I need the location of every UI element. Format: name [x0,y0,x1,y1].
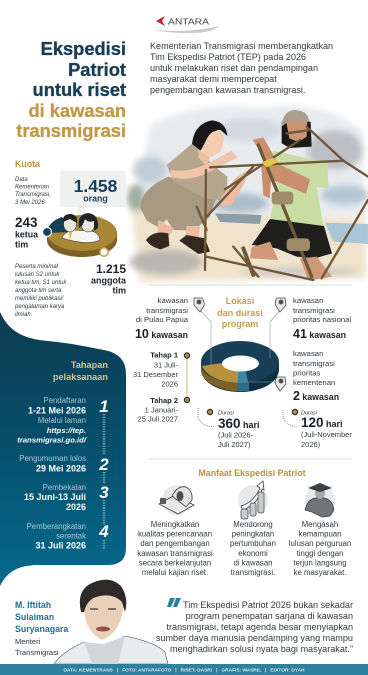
intro text: pengembangan kawasan transmigrasi. [150,85,305,95]
benefit 2: di kawasan [233,558,273,568]
duration: 120 hari: (Juli-November [301,430,352,439]
duration: 120 hari: 120 hari [301,415,343,430]
step numbers: 4 [98,522,109,541]
text: requirements: Peserta minimal [15,264,59,270]
right: prioritas: prioritas [293,368,320,378]
benefit 3: Mengasah [302,520,338,529]
stat: ketua tim: tim [15,240,28,250]
step numbers: 1 [99,397,109,416]
left: papua: transmigrasi [146,306,188,315]
logo: ANTARA [154,16,219,33]
quote text: sumber daya manusia pendamping yang mampu [156,633,353,643]
timeline: tahap: 1 Januari- [145,406,178,414]
person name and role: Sulaiman [15,612,54,622]
connector lines [199,309,281,382]
panel: tahapan pelaksanaan [0,312,126,586]
person name and role: Menteri [15,637,41,646]
duration: 360 hari [207,409,260,449]
step numbers [98,397,109,541]
dotted connectors [198,408,298,427]
divider top [149,284,352,286]
timeline: tahap: Tahap 2 [150,396,178,405]
steps text: Pengumuman lolos [19,454,86,463]
text: data source: Transmigrasi, [15,192,51,198]
quote text: transmigrasi, tetapi agenda besar menyiapkan [166,622,353,632]
intro text: masyarakat demi mempercepat [150,74,277,84]
benefit 2 [230,520,276,577]
panel: kuota [14,159,127,318]
benefit 1: secara berkelanjutan [139,558,211,568]
callout: total [60,171,126,218]
stat: anggota tim [91,262,127,296]
benefit 3: terjun langsung [293,558,347,568]
sea and boats [325,223,368,244]
text: requirements: anggota tim serta [15,288,62,294]
intro text [150,41,333,95]
left: papua [135,296,189,341]
intro text: Tim Ekspedisi Patriot (TEP) pada 2026 [150,52,306,62]
benefit 1: kawasan transmigrasi [137,549,213,558]
intro text: untuk melakukan riset dan pendampingan [150,63,318,73]
benefit 1: Meningkatkan [151,520,199,529]
icon: quote mark [167,598,181,607]
person name and role: Suryanagara [15,624,68,634]
benefit 1: kualitas perencanaan [138,530,212,538]
timeline ticks [103,414,105,549]
portrait: M. Iftitah Suryanagara [54,580,168,664]
duration: 360 hari: 360 hari [218,416,260,431]
right: prioritas [293,296,351,403]
benefit 2: pertumbuhan [230,539,276,548]
heading: lokasi: program [222,319,258,329]
stat: ketua tim: 243 [15,215,38,230]
person name and role: M. Iftitah [15,600,51,610]
branch frame [197,127,368,280]
benefit 2: Mendorong [233,520,273,529]
benefit texts [137,520,351,577]
stat: anggota tim: anggota [91,276,127,286]
steps text: Pembekalan [43,483,86,492]
icon: graduate [305,483,335,517]
intro text: Kementerian Transmigrasi memberangkatkan [150,41,333,51]
heading: lokasi: dan durasi [217,308,263,318]
icon: growth arrow with coins [238,481,268,519]
heading: lokasi [217,296,263,329]
timeline: tahap: 31 Desember [133,370,178,379]
steps text: Pemberangkatan [27,522,86,531]
person name and role [15,600,68,657]
text: data source [15,177,51,206]
right: prioritas: 2 kawasan [293,389,339,403]
quote text: menghadirkan solusi nyata bagi masyarakat.” [170,644,353,654]
title: untuk riset [33,79,126,100]
benefit 3: kemampuan [299,530,341,538]
panel: lokasi dan durasi program [133,296,352,449]
heading: manfaat: Manfaat Ekspedisi Patriot [198,468,306,478]
callout: total: 1.458 [74,176,118,196]
benefit 2: transmigrasi. [231,568,275,577]
logo: ANTARA: ANTARA [168,16,209,26]
text: requirements: ilmiah. [15,312,32,318]
steps text: serentak [56,532,86,540]
title: Ekspedisi [41,38,126,59]
quote text: program penempatan sarjana di kawasan [186,611,353,621]
footer bar: DATA: KEMENTRANS | FOTO: ANTARAFOTO | RISET: DASRI | GRAFIS: WASRIL | EDITOR: DYAH [63,668,305,674]
timeline: tahap: 31 Juli- [154,360,178,370]
text: requirements: memiliki publikasi/ [15,296,65,302]
duration: 120 hari: Durasi [301,410,318,416]
title: transmigrasi [16,120,126,141]
illustration: two researchers building a branch frame on a beach [127,106,368,282]
quote text [156,600,353,654]
woman on the left [140,177,217,231]
title: di kawasan [28,100,126,121]
benefit 2: peningkatan [232,530,274,538]
duration: 120 hari [292,409,352,449]
timeline: tahap: Tahap 1 [150,350,178,360]
stat: anggota tim: tim [112,286,126,296]
heading: tahapan: pelaksanaan [53,372,108,382]
timeline: tahap: 25 Juli 2027 [138,414,178,424]
step numbers: 3 [99,483,109,502]
donut chart: lokasi [201,341,279,392]
step numbers: 2 [98,455,109,474]
heading: lokasi: Lokasi [226,296,254,306]
left: papua: 10 kawasan [135,327,188,341]
callout: total: orang [83,194,108,204]
timeline: tahap [133,350,190,424]
donut: ketua and anggota share [42,213,117,257]
steps text: 31 Juli 2026 [35,540,86,550]
person name and role: Transmigrasi [15,648,59,657]
sky and sand wash [127,106,368,282]
divider bottom [149,458,352,460]
benefit 1: melalui kajian riset. [142,568,208,577]
stat: anggota tim: 1.215 [96,262,126,276]
quote text: Tim Ekspedisi Patriot 2026 bukan sekadar [183,600,353,610]
steps text: Pendaftaran [44,396,86,405]
right: prioritas: transmigrasi [293,359,335,368]
right: prioritas: prioritas nasional [293,315,351,324]
right: prioritas: kawasan [293,296,323,305]
steps text: 1-21 Mei 2026 [28,406,86,416]
steps text: 29 Mei 2026 [36,464,86,474]
steps text: Melalui laman [38,416,86,425]
right: prioritas: transmigrasi [293,306,335,315]
timeline: tahap: 2026 [161,380,178,388]
person on the right [270,151,329,229]
text: requirements: ketua tim, S1 untuk [15,280,67,286]
benefit 1: dan pengembangan [140,539,210,548]
duration: 360 hari: Durasi [218,410,235,416]
duration: 120 hari: 2026) [301,440,321,449]
text: requirements [14,264,67,318]
text: data source: Data [15,177,28,183]
icon: pins [194,298,286,391]
right: prioritas: kawasan [293,349,323,358]
title: Patriot [68,59,126,80]
steps text [17,396,87,550]
icon: two people [62,213,100,243]
benefit 2: ekonomi [238,549,268,558]
duration: 360 hari: (Juli 2026- [218,430,254,440]
benefit 3: lulusan perguruan [289,539,351,548]
heading: tahapan: Tahapan [71,360,108,370]
benefit 3: ke masyarakat. [294,568,346,577]
text: data source: 3 Mei 2026 [15,200,45,206]
right: prioritas: 41 kawasan [293,327,346,341]
footer bar [0,664,368,675]
text: requirements: pengalaman karya [14,304,65,310]
text: data source: Kementerian [15,184,50,190]
benefit 3: tinggi dengan [297,549,343,558]
heading: tahapan [53,360,108,382]
title [16,38,126,141]
icon: map with pin [159,485,194,515]
text: requirements: lulusan S2 untuk [15,272,60,278]
left: papua: di Pulau Papua [136,315,189,324]
steps text: transmigrasi.go.id/ [17,436,87,444]
stat: ketua tim: ketua [15,230,38,240]
heading: kuota: Kuota [15,159,40,169]
steps text: 2026 [66,502,86,512]
benefit 3 [289,520,351,577]
duration: 360 hari: Juli 2027) [218,440,251,449]
right: prioritas: kementerian [293,378,335,387]
steps text: https://tep. [47,426,86,435]
stat: ketua tim [15,215,38,250]
left: papua: kawasan [158,296,188,305]
panel: manfaat [137,468,351,577]
benefit 1 [137,520,213,577]
steps text: 15 Juni-13 Juli [24,492,86,502]
